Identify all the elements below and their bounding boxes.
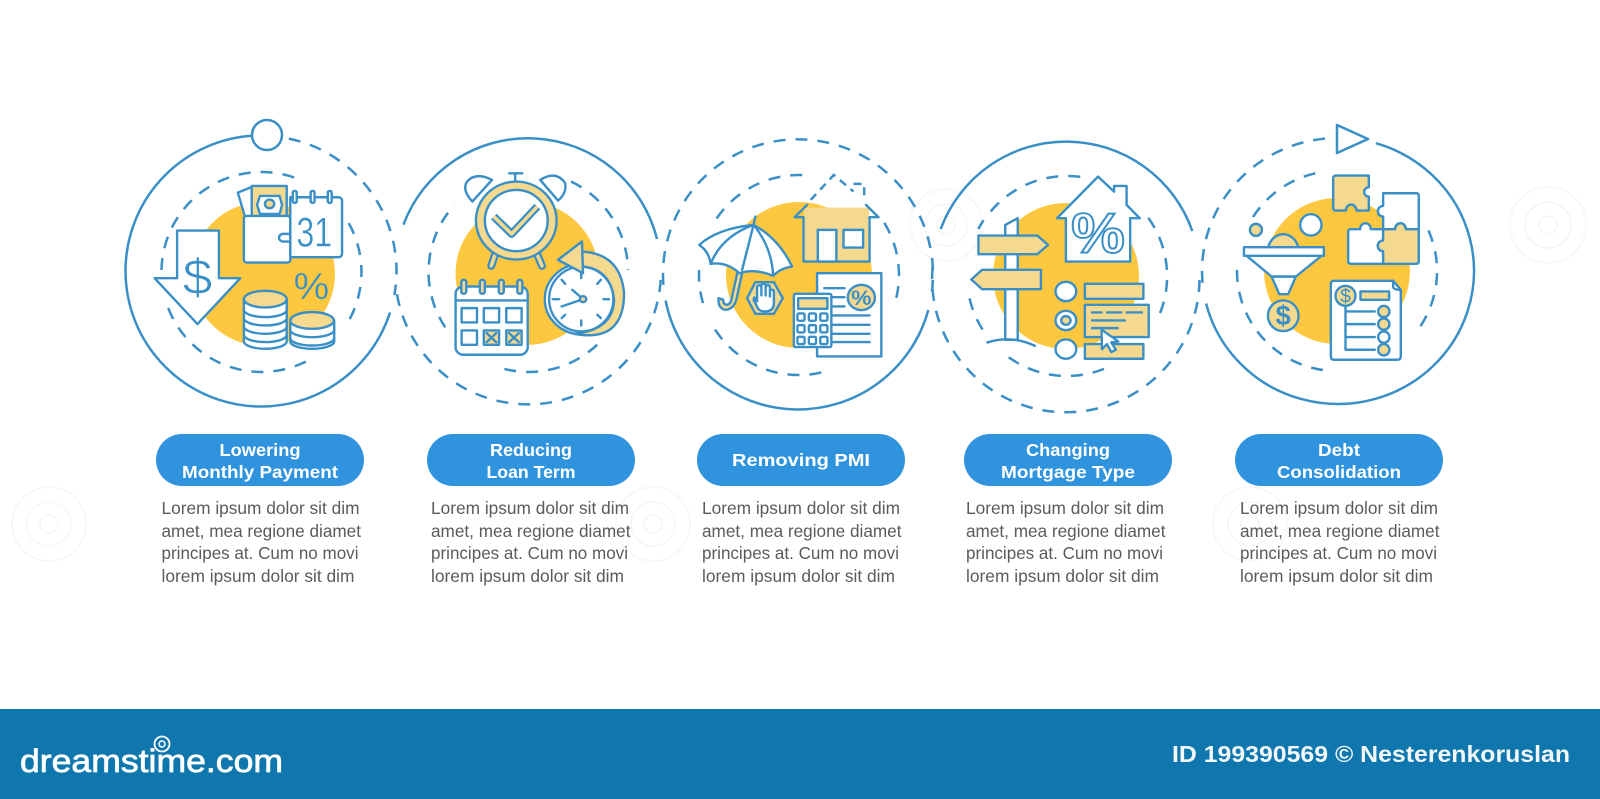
heading pill: Reducing Loan Term: Reducing (490, 440, 572, 460)
icon: house with percent (1057, 177, 1140, 265)
text block 3: amet, mea regione diamet (702, 521, 902, 541)
text block 1: lorem ipsum dolor sit dim (162, 566, 354, 586)
outer ring 4 (932, 142, 1200, 412)
inner dashed ring 2 (429, 182, 628, 372)
panel: debt consolidation circle (1202, 125, 1474, 404)
heading pill: Reducing Loan Term: Loan Term (486, 462, 576, 482)
inner dashed ring 1 (162, 172, 361, 372)
icon: checklist document: $ (1340, 286, 1351, 307)
yellow disc 1 (191, 202, 335, 346)
text block 5: Lorem ipsum dolor sit dim (1240, 498, 1438, 518)
outer ring 2 (396, 138, 661, 404)
text block 4 (966, 498, 1166, 586)
text block 2 (431, 498, 631, 586)
text block 3: lorem ipsum dolor sit dim (702, 566, 895, 586)
icon: umbrella, house, stop hand, calculator, document (699, 175, 881, 356)
heading pill: Removing PMI (697, 434, 905, 486)
heading pill: Debt Consolidation: Debt (1318, 440, 1360, 460)
icon: funnel, puzzle, checklist (1244, 176, 1419, 360)
icon: radio options list (1056, 282, 1149, 359)
outer ring 3 (663, 139, 933, 409)
icon: calendar 31 (290, 191, 342, 257)
text block 4: lorem ipsum dolor sit dim (966, 566, 1159, 586)
icon: signpost, percent house, option list (971, 177, 1149, 359)
inner dashed ring 4 (969, 176, 1167, 376)
icon: funnel with coin: $ (1276, 300, 1291, 331)
heading pill: Lowering Monthly Payment (156, 434, 364, 486)
icon: stopwatch with return arrow (545, 242, 624, 335)
text block 4: Lorem ipsum dolor sit dim (966, 498, 1164, 518)
icon: coin stacks (244, 291, 334, 349)
text block 2: lorem ipsum dolor sit dim (431, 566, 624, 586)
text block 3 (702, 498, 902, 586)
text block 3: Lorem ipsum dolor sit dim (702, 498, 900, 518)
icon: down arrow with dollar: $ (183, 249, 212, 305)
heading pill: Lowering Monthly Payment: Monthly Payment (182, 462, 338, 482)
icon: checklist document (1331, 281, 1401, 360)
text block 2: amet, mea regione diamet (431, 521, 631, 541)
icon: percent document (817, 273, 881, 356)
icon: alarm clock with check (465, 173, 565, 266)
icon: funnel with coin (1244, 214, 1324, 331)
text block 4: amet, mea regione diamet (966, 521, 1166, 541)
yellow disc 5 (1264, 198, 1410, 344)
yellow disc 2 (456, 202, 598, 345)
icon: wallet with banknote (238, 186, 290, 263)
panel: removing PMI circle (663, 139, 933, 409)
icon: calendar grid (456, 280, 528, 355)
panel: changing mortgage type circle (932, 142, 1200, 412)
text block 3: principes at. Cum no movi (702, 543, 899, 563)
start marker circle (252, 120, 282, 150)
panel: lowering monthly payment circle (126, 120, 397, 406)
icon: calculator (794, 294, 831, 347)
panel: reducing loan term circle (396, 138, 661, 404)
icon: puzzle pieces (1333, 176, 1419, 264)
text block 1: principes at. Cum no movi (162, 543, 358, 563)
icon: percent: % (294, 266, 329, 307)
text block 5 (1240, 498, 1440, 586)
inner dashed ring 5 (1237, 173, 1437, 370)
heading pill: Lowering Monthly Payment: Lowering (220, 440, 300, 460)
text block 5: lorem ipsum dolor sit dim (1240, 566, 1433, 586)
text block 5: amet, mea regione diamet (1240, 521, 1440, 541)
icon: signpost (971, 218, 1048, 346)
text block 1: Lorem ipsum dolor sit dim (162, 498, 360, 518)
text block 2: principes at. Cum no movi (431, 543, 628, 563)
icon: percent document: % (851, 286, 872, 310)
inner dashed ring 3 (699, 175, 899, 375)
outer ring 5 (1202, 139, 1474, 404)
footer image id and author: ID 199390569 © Nesterenkoruslan (1172, 741, 1570, 767)
text block 1: amet, mea regione diamet (162, 521, 361, 541)
heading pill: Debt Consolidation (1235, 434, 1443, 486)
yellow disc 4 (993, 203, 1139, 349)
outer ring 1 (126, 136, 397, 407)
icon: umbrella (699, 217, 792, 310)
yellow disc 3 (726, 202, 872, 348)
text block 2: Lorem ipsum dolor sit dim (431, 498, 629, 518)
footer bar (0, 709, 1600, 799)
heading pill: Removing PMI: Removing PMI (732, 450, 870, 470)
icon: calendar 31: 31 (296, 210, 332, 256)
icon: house (795, 175, 878, 262)
icon: stop hand hexagon (747, 282, 783, 314)
icon: alarm clock, calendar, stopwatch (456, 173, 624, 355)
text block 4: principes at. Cum no movi (966, 543, 1163, 563)
heading pill: Changing Mortgage Type: Mortgage Type (1001, 462, 1135, 482)
heading pill: Debt Consolidation: Consolidation (1277, 462, 1401, 482)
icon: down arrow with dollar (155, 231, 240, 324)
heading pill: Changing Mortgage Type (964, 434, 1172, 486)
text block 1 (162, 498, 361, 586)
text block 5: principes at. Cum no movi (1240, 543, 1437, 563)
heading pill: Changing Mortgage Type: Changing (1026, 440, 1110, 460)
end marker triangle (1337, 125, 1368, 153)
icon: house with percent: % (1071, 202, 1125, 265)
icon: wallet, calendar, arrow, coins (155, 186, 342, 349)
footer logo: dreamstime.com: dreamstime.com (20, 743, 283, 779)
heading pill: Reducing Loan Term (427, 434, 635, 486)
